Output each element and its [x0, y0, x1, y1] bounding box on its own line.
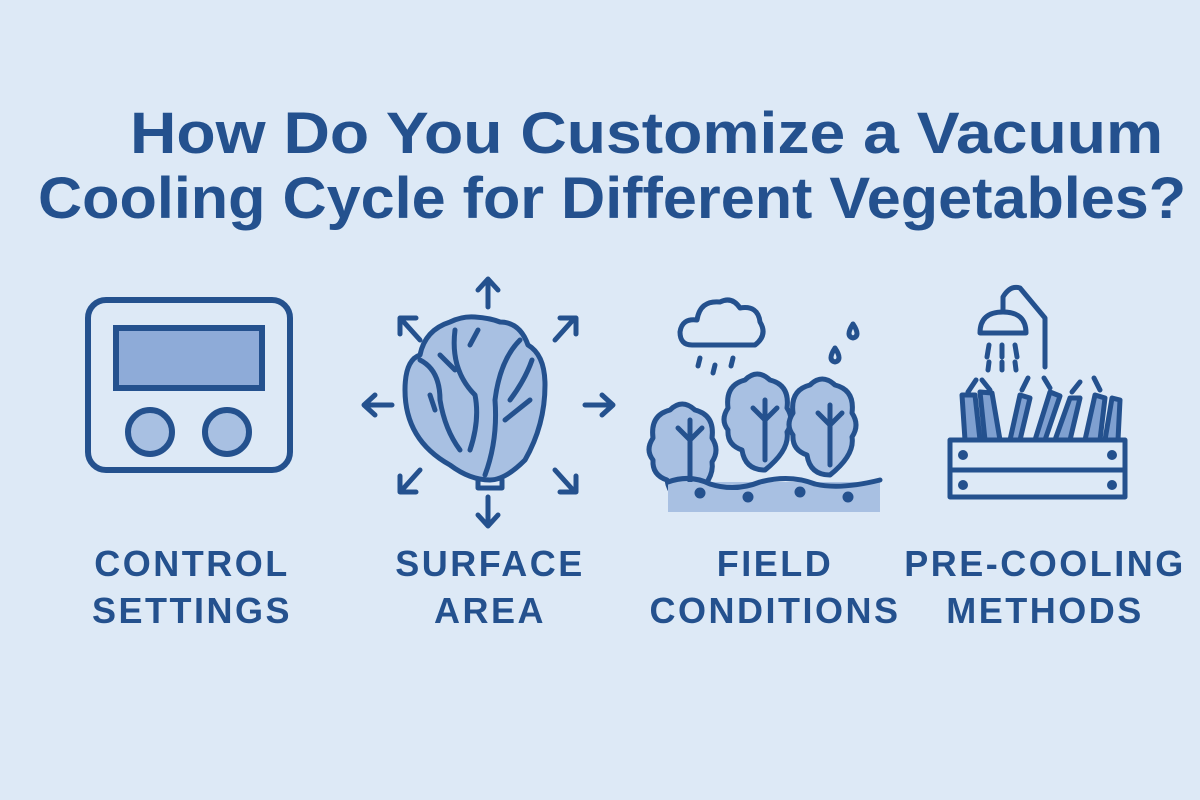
label: pre-cooling methods: PRE-COOLING: [904, 543, 1186, 584]
label: control settings: CONTROL: [94, 543, 290, 584]
label: pre-cooling methods: [904, 543, 1186, 631]
icon: pre-cooling: [950, 287, 1125, 497]
icon: cabbage with arrows: [364, 279, 613, 526]
label: control settings: SETTINGS: [92, 590, 292, 631]
icon: control panel: [88, 300, 290, 470]
title: How Do You Customize a Vacuum: [130, 101, 1163, 166]
label: surface area: SURFACE: [395, 543, 585, 584]
icon: field conditions: [649, 300, 880, 512]
label: field conditions: FIELD: [717, 543, 833, 584]
title: [38, 101, 1186, 231]
label: pre-cooling methods: METHODS: [946, 590, 1144, 631]
label: field conditions: [649, 543, 900, 631]
label: surface area: [395, 543, 585, 631]
label: field conditions: CONDITIONS: [649, 590, 900, 631]
label: control settings: [92, 543, 292, 631]
label: surface area: AREA: [434, 590, 546, 631]
title: Cooling Cycle for Different Vegetables?: [38, 166, 1186, 231]
